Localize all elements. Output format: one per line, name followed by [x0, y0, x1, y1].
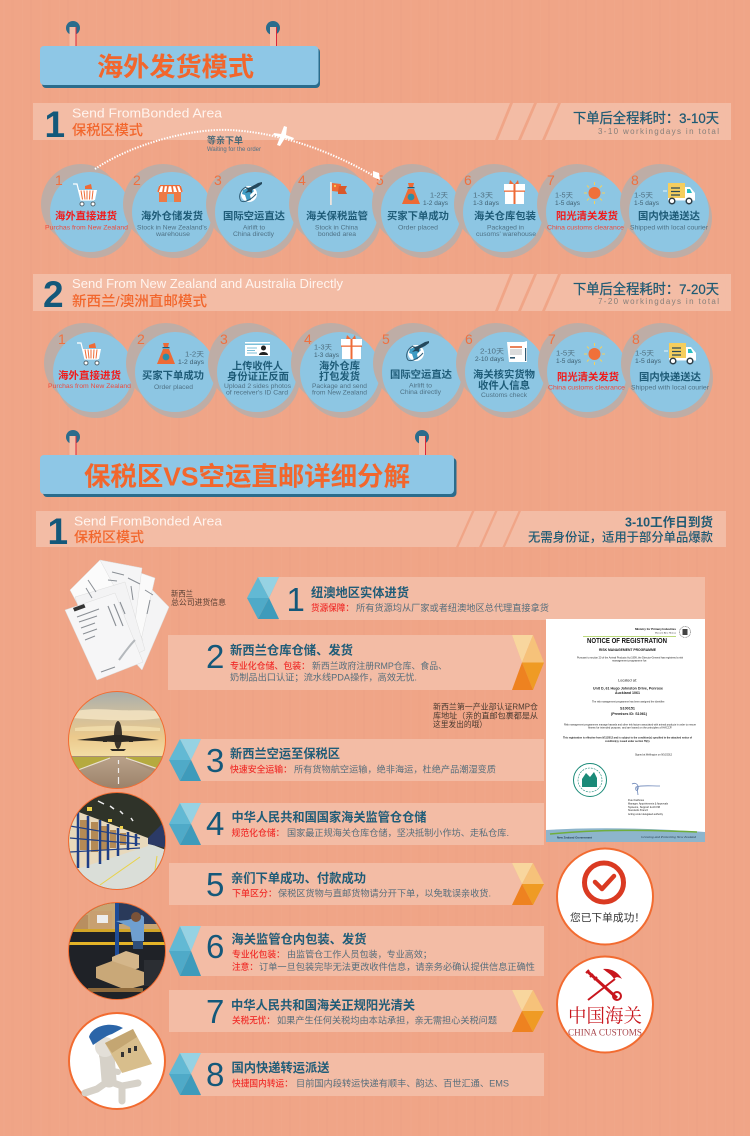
- badge: China Customs emblem: [557, 956, 653, 1052]
- circle 1: 1: [55, 172, 63, 188]
- circle 3: [208, 323, 300, 418]
- caption: company purchase info: 总公司进货信息: [171, 597, 226, 607]
- certificate: notice of registration: The risk management programme has been assigned the identifier:: [592, 700, 665, 704]
- badge: China Customs emblem: 中国海关: [568, 1005, 642, 1027]
- certificate: notice of registration: Growing and Protecting New Zealand: [641, 835, 696, 839]
- circle 5: 1-2 days: [423, 201, 448, 207]
- circle 6: 收件人信息: [478, 379, 530, 392]
- circle 1: 海外直接进货: [58, 369, 121, 382]
- step 3: NZ air transport to bonded area: 所有货物航空运输，绝非海运，杜绝产品潮湿变质: [294, 764, 496, 774]
- circle 1: Purchas from New Zealand: [48, 383, 131, 390]
- photo: warehouse interior: [68, 792, 166, 890]
- circle 7: [538, 323, 630, 418]
- step 6: packaging in customs warehouse: 专业化包装：: [232, 948, 285, 960]
- circle 7: China customs clearance: [548, 384, 625, 392]
- certificate: notice of registration: Acting under delegated authority: [628, 813, 664, 816]
- circle 4: 1-3天: [314, 344, 332, 352]
- circle 7: 7: [548, 331, 556, 347]
- circle 1: Purchas from New Zealand: [45, 224, 128, 232]
- circle 4: 4: [298, 172, 306, 188]
- circle 6: [454, 164, 546, 258]
- certificate caption: 这里发出的哦）: [433, 719, 487, 729]
- circle 3: 身份证正反面: [227, 370, 289, 383]
- circle 4: 打包发货: [319, 370, 360, 383]
- step 1: physical purchase in NZ and Australia: 纽澳地区实体进货: [311, 585, 409, 600]
- circle 5: 5: [382, 331, 390, 347]
- step 1: physical purchase in NZ and Australia: [247, 577, 705, 620]
- circle 4: Stock in China: [315, 224, 358, 232]
- circle 6: 6: [464, 172, 472, 188]
- certificate: notice of registration: RISK MANAGEMENT PROGRAMME: [599, 648, 656, 652]
- step 5: order placed and paid: 保税区货物与直邮货物请分开下单，以免耽误亲收货.: [278, 888, 491, 898]
- circle 3: [206, 164, 298, 258]
- badge: order success: [557, 848, 653, 944]
- band 3: bonded area details header: 保税区模式: [74, 529, 144, 545]
- circle 3: Upload 2 sides photos: [224, 383, 292, 390]
- step 2: NZ warehouse storage and shipping: 2: [206, 638, 224, 675]
- circle 8: 8: [631, 172, 639, 188]
- certificate: notice of registration: [546, 619, 705, 842]
- step 8: domestic express delivery: 国内快递转运派送: [232, 1060, 330, 1075]
- circle 4: 4: [304, 331, 312, 347]
- circle 5: 国际空运直达: [390, 368, 453, 381]
- photo: plane taking off: [68, 691, 166, 790]
- band 2: direct mail mode header: 2: [43, 274, 64, 315]
- circle 3: 上传收件人: [232, 360, 284, 372]
- circle 3: 3: [214, 172, 222, 188]
- circle 8: 1-5天: [634, 192, 653, 200]
- band 1: bonded area mode header: Send FromBonded Area: [72, 106, 223, 120]
- circle 6: 1-3天: [473, 192, 493, 200]
- circle 7: 1-5天: [555, 192, 573, 200]
- certificate caption: 库地址（亲的直邮包裹都是从: [433, 710, 538, 720]
- step 1: physical purchase in NZ and Australia: 所有货源均从厂家或者纽澳地区总代理直接拿货: [356, 602, 549, 613]
- circle 4: 1-3 days: [314, 353, 339, 359]
- certificate: notice of registration: Risk management programmes manage hazards and other risk factors associated with animal products in order to ensure: [564, 724, 697, 726]
- circle 8: 1-5 days: [635, 359, 661, 365]
- certificate: notice of registration: Peter Fairbrass: [628, 799, 645, 802]
- circle 2: Order placed: [154, 384, 193, 391]
- waiting for the order note: Waiting for the order: [207, 147, 261, 153]
- band 1: bonded area mode header: [33, 103, 731, 145]
- circle 8: [620, 164, 712, 258]
- certificate: notice of registration: Located at:: [618, 678, 637, 682]
- step 6: packaging in customs warehouse: 订单一旦包装完毕无法更改收件信息，请亲务必确认提供信息正确性: [259, 961, 535, 972]
- circle 7: 7: [547, 172, 555, 188]
- circle 4: from New Zealand: [312, 390, 367, 396]
- certificate: notice of registration: This registration is effective from 9/11/2012 and is subject to the condition(s) specified in the attached notice of: [563, 736, 692, 740]
- certificate caption: [433, 702, 538, 729]
- circle 8: Shipped with local courier: [630, 224, 709, 232]
- circle 4: bonded area: [318, 231, 356, 238]
- heading board: bonded vs direct breakdown: [40, 430, 456, 497]
- step 6: packaging in customs warehouse: 由监管仓工作人员包装，专业高效；: [287, 948, 432, 960]
- certificate: notice of registration: Manatū Ahu Matua: [655, 632, 677, 634]
- waiting for the order note: 等亲下单: [207, 134, 243, 146]
- circle 8: 国内快递送达: [639, 370, 702, 384]
- circle 6: [456, 323, 548, 418]
- circle 2: 2: [137, 331, 145, 347]
- certificate: notice of registration: Pursuant to section 20 of the Animal Products Act 1999, the Director-General has registered a risk: [577, 656, 684, 660]
- photo: warehouse worker: [68, 902, 166, 1000]
- circle 5: [373, 323, 465, 418]
- heading board: overseas shipping modes: [40, 21, 320, 88]
- circle 1: 海外直接进货: [55, 210, 117, 223]
- step 5: order placed and paid: [169, 863, 544, 905]
- certificate: notice of registration: New Zealand Government: [557, 836, 592, 840]
- caption: company purchase info: 新西兰: [171, 588, 193, 598]
- circle 2: [126, 323, 218, 418]
- circle 6: 海关核实货物: [473, 368, 535, 381]
- circle 1: 1: [58, 331, 66, 347]
- circle 3: 国际空运直达: [223, 210, 286, 223]
- circle 2: 2: [133, 172, 141, 188]
- circle 5: [372, 164, 464, 258]
- step 6: packaging in customs warehouse: 6: [206, 928, 224, 965]
- circle 8: 1-5 days: [634, 201, 659, 207]
- step 6: packaging in customs warehouse: [169, 926, 544, 976]
- band 1: bonded area mode header: 保税区模式: [72, 122, 143, 138]
- certificate: notice of registration: (Premises ID: S1061): [611, 712, 647, 716]
- step 8: domestic express delivery: 目前国内段转运快递有顺丰、韵达、百世汇通、EMS: [296, 1078, 509, 1088]
- circle 8: 1-5天: [635, 350, 654, 358]
- circle 6: 海关仓库包装: [474, 210, 537, 223]
- row 1 step circles: [41, 164, 712, 258]
- badge: order success: 您已下单成功！: [570, 911, 645, 924]
- step 7: customs clearance: [169, 990, 544, 1032]
- step 3: NZ air transport to bonded area: [169, 739, 544, 781]
- band 3: bonded area details header: 3-10工作日到货: [625, 514, 713, 530]
- step 6: packaging in customs warehouse: 注意：: [232, 961, 258, 972]
- circle 6: cusoms' warehouse: [476, 231, 536, 238]
- band 3: bonded area details header: Send FromBonded Area: [74, 514, 223, 528]
- circle 3: China directly: [233, 231, 275, 238]
- documents: company purchase papers: [65, 560, 169, 680]
- heading board: bonded vs direct breakdown: 保税区VS空运直邮详细分解: [84, 462, 410, 492]
- certificate caption: 新西兰第一产业部认证RMP仓: [433, 702, 538, 712]
- step 7: customs clearance: 中华人民共和国海关正规阳光清关: [231, 998, 416, 1012]
- step 2: NZ warehouse storage and shipping: 专业化仓储、包装：: [230, 660, 310, 671]
- circle 4: [289, 164, 381, 258]
- certificate: notice of registration: fitness for intended purpose, and are based on the principles of HACCP.: [588, 726, 672, 730]
- certificate: notice of registration: Manager, Appointments & Approvals: [628, 802, 669, 806]
- circle 7: 阳光清关发货: [556, 210, 618, 223]
- step 8: domestic express delivery: [169, 1053, 544, 1096]
- step 5: order placed and paid: 亲们下单成功、付款成功: [231, 870, 366, 886]
- circle 7: [537, 164, 629, 258]
- circle 4: [291, 323, 383, 418]
- step 8: domestic express delivery: 快捷国内转运：: [232, 1078, 293, 1088]
- circle 5: Airlift to: [409, 382, 432, 390]
- band 2: direct mail mode header: [33, 274, 731, 315]
- circle 4: 海外仓库: [319, 360, 360, 372]
- step 7: customs clearance: 如果产生任何关税均由本站承担，亲无需担心关税问题: [277, 1014, 497, 1026]
- band 2: direct mail mode header: 7-20 workingdays in total: [598, 297, 719, 306]
- step 3: NZ air transport to bonded area: 新西兰空运至保税区: [230, 746, 340, 761]
- heading board: overseas shipping modes: 海外发货模式: [97, 52, 254, 82]
- circle 5: 1-2天: [430, 192, 448, 200]
- certificate: notice of registration: S100151: [620, 706, 635, 710]
- circle 6: 6: [465, 331, 473, 347]
- certificate: notice of registration: NOTICE OF REGISTRATION: [587, 636, 667, 645]
- circle 4: Package and send: [312, 383, 367, 390]
- circle 2: warehouse: [155, 231, 190, 238]
- circle 3: of receiver's ID Card: [226, 390, 288, 396]
- circle 6: 2-10 days: [475, 357, 504, 363]
- circle 2: [123, 164, 215, 258]
- certificate: notice of registration: Signed at Wellington on 9/10/2012: [635, 754, 673, 756]
- circle 6: Customs check: [481, 392, 528, 399]
- circle 2: Stock in New Zealand's: [137, 224, 208, 232]
- step 6: packaging in customs warehouse: 海关监管仓内包装、发货: [232, 932, 366, 946]
- step 3: NZ air transport to bonded area: 快速安全运输：: [230, 764, 292, 774]
- circle 2: 买家下单成功: [142, 369, 204, 382]
- circle 8: [621, 323, 713, 418]
- circle 1: [44, 323, 136, 418]
- band 3: bonded area details header: 1: [48, 511, 68, 552]
- step 7: customs clearance: 关税无忧：: [232, 1014, 275, 1026]
- certificate: notice of registration: Auckland 1061: [615, 691, 640, 695]
- certificate: notice of registration: Standards Branch: [628, 809, 649, 812]
- step 1: physical purchase in NZ and Australia: 1: [286, 581, 305, 618]
- band 2: direct mail mode header: 新西兰/澳洲直邮模式: [72, 293, 207, 309]
- circle 2: 1-2 days: [178, 360, 204, 366]
- photo: courier carrying a box: [69, 1013, 165, 1109]
- circle 5: 5: [376, 172, 384, 188]
- band 1: bonded area mode header: 3-10 workingdays in total: [598, 127, 719, 136]
- circle 2: 海外仓储发货: [141, 210, 203, 223]
- waiting for the order note: [207, 134, 261, 153]
- arrow: dotted flight path from step 1 to step 5: [95, 126, 380, 180]
- caption: company purchase info: [171, 588, 226, 607]
- certificate: notice of registration: Systems, Support & ACVM: [628, 806, 660, 809]
- step 4: national customs supervised storage: [169, 803, 544, 845]
- step 7: customs clearance: 7: [206, 993, 224, 1030]
- circle 5: China directly: [400, 389, 442, 396]
- circle 5: Order placed: [398, 224, 438, 232]
- certificate: notice of registration: management programme for:: [612, 660, 647, 662]
- row 2 step circles: [44, 323, 713, 418]
- band 2: direct mail mode header: Send From New Zealand and Australia Directly: [72, 276, 343, 291]
- step 2: NZ warehouse storage and shipping: [168, 635, 544, 690]
- step 4: national customs supervised storage: 国家最正规海关仓库仓储，坚决抵制小作坊、走私仓库.: [287, 827, 509, 838]
- step 4: national customs supervised storage: 中华人民共和国国家海关监管仓仓储: [232, 810, 426, 824]
- circle 6: Packaged in: [487, 224, 524, 232]
- step 5: order placed and paid: 5: [206, 866, 224, 903]
- step 8: domestic express delivery: 8: [206, 1056, 224, 1093]
- circle 7: China customs clearance: [547, 224, 624, 232]
- band 3: bonded area details header: [36, 511, 726, 552]
- step 4: national customs supervised storage: 4: [206, 805, 224, 842]
- circle 6: 2-10天: [480, 348, 504, 356]
- circle 7: 1-5天: [556, 350, 575, 358]
- step 2: NZ warehouse storage and shipping: 奶制品出口认证；流水线PDA操作，高效无忧.: [230, 672, 417, 682]
- circle 8: Shipped with local courier: [631, 384, 710, 392]
- circle 1: [41, 164, 133, 258]
- circle 7: 1-5 days: [556, 359, 581, 365]
- certificate: notice of registration: condition(s), issued under section 76(1).: [605, 740, 650, 743]
- circle 8: 8: [632, 331, 640, 347]
- step 4: national customs supervised storage: 规范化仓储：: [232, 827, 284, 838]
- step 2: NZ warehouse storage and shipping: 新西兰政府注册RMP仓库、食品、: [312, 660, 447, 671]
- circle 8: 国内快递送达: [638, 210, 701, 223]
- circle 2: 1-2天: [185, 350, 204, 358]
- band 1: bonded area mode header: 下单后全程耗时：3-10天: [573, 110, 719, 126]
- circle 6: 1-3 days: [473, 201, 499, 207]
- badge: China Customs emblem: CHINA CUSTOMS: [568, 1028, 642, 1038]
- circle 3: Airlift to: [243, 224, 265, 232]
- circle 3: 3: [220, 331, 228, 347]
- step 1: physical purchase in NZ and Australia: 货源保障：: [311, 602, 354, 613]
- circle 7: 阳光清关发货: [557, 370, 619, 384]
- certificate: notice of registration: Unit D, 61 Hugo Johnston Drive, Penrose: [593, 686, 663, 690]
- band 1: bonded area mode header: 1: [44, 104, 65, 145]
- circle 4: 海关保税监管: [306, 210, 368, 223]
- band 2: direct mail mode header: 下单后全程耗时：7-20天: [573, 281, 719, 297]
- band 3: bonded area details header: 无需身份证，适用于部分单品爆款: [528, 530, 713, 544]
- step 2: NZ warehouse storage and shipping: 新西兰仓库仓储、发货: [230, 642, 353, 658]
- circle 5: 买家下单成功: [387, 210, 449, 223]
- step 3: NZ air transport to bonded area: 3: [206, 742, 224, 779]
- circle 7: 1-5 days: [555, 201, 580, 207]
- certificate: notice of registration: Ministry for Primary Industries: [635, 627, 676, 631]
- step 5: order placed and paid: 下单区分：: [232, 888, 277, 898]
